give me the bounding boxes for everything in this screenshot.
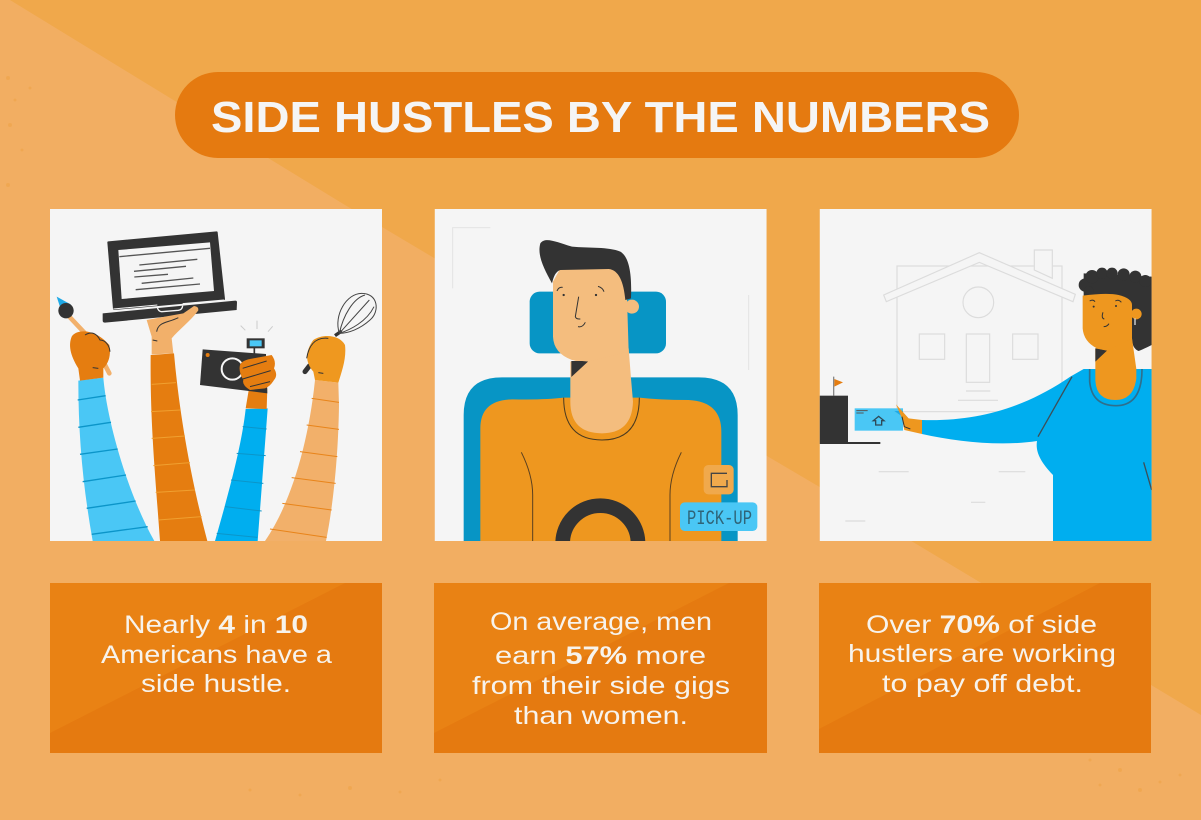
stat text: to pay off debt. — [882, 670, 1083, 698]
stat text — [472, 608, 730, 730]
icon: pick-up badge — [704, 465, 734, 494]
pick-up label: PICK-UP — [687, 508, 752, 531]
icon: dollar bill — [855, 408, 903, 431]
stat text: earn 57% more — [495, 642, 706, 670]
icon: car seat — [464, 377, 738, 541]
stat text: On average, men — [490, 608, 712, 636]
icon: arm holding laptop — [103, 232, 237, 541]
stat text: Over 70% of side — [866, 611, 1097, 639]
panel: stat nearly 4 in 10 — [50, 583, 382, 753]
man figure — [480, 240, 722, 541]
panel: stat men earn 57% more — [434, 583, 767, 753]
icon: mailbox — [820, 377, 880, 444]
title: SIDE HUSTLES BY THE NUMBERS — [211, 93, 990, 142]
title banner — [175, 72, 1019, 158]
stat text: Nearly 4 in 10 — [124, 611, 308, 639]
panel: hands holding side-hustle tools — [50, 209, 382, 541]
stat text: hustlers are working — [848, 640, 1116, 668]
pick-up label — [680, 502, 757, 531]
icon: arm with paintbrush — [57, 297, 154, 541]
stat text: than women. — [514, 702, 688, 730]
stat text — [101, 611, 332, 698]
stat text: side hustle. — [141, 670, 291, 698]
stat text: from their side gigs — [472, 672, 730, 700]
stat text: Americans have a — [101, 641, 332, 669]
panel: man in car seat — [434, 209, 767, 541]
panel: stat over 70% paying debt — [819, 583, 1151, 753]
icon: house outline — [845, 250, 1075, 521]
panel: woman paying off house — [820, 209, 1152, 541]
woman figure — [896, 268, 1152, 541]
icon: arm holding camera — [200, 321, 276, 541]
icon: headrest — [530, 292, 666, 353]
icon: arm holding whisk — [265, 293, 376, 541]
stat text — [848, 611, 1116, 698]
